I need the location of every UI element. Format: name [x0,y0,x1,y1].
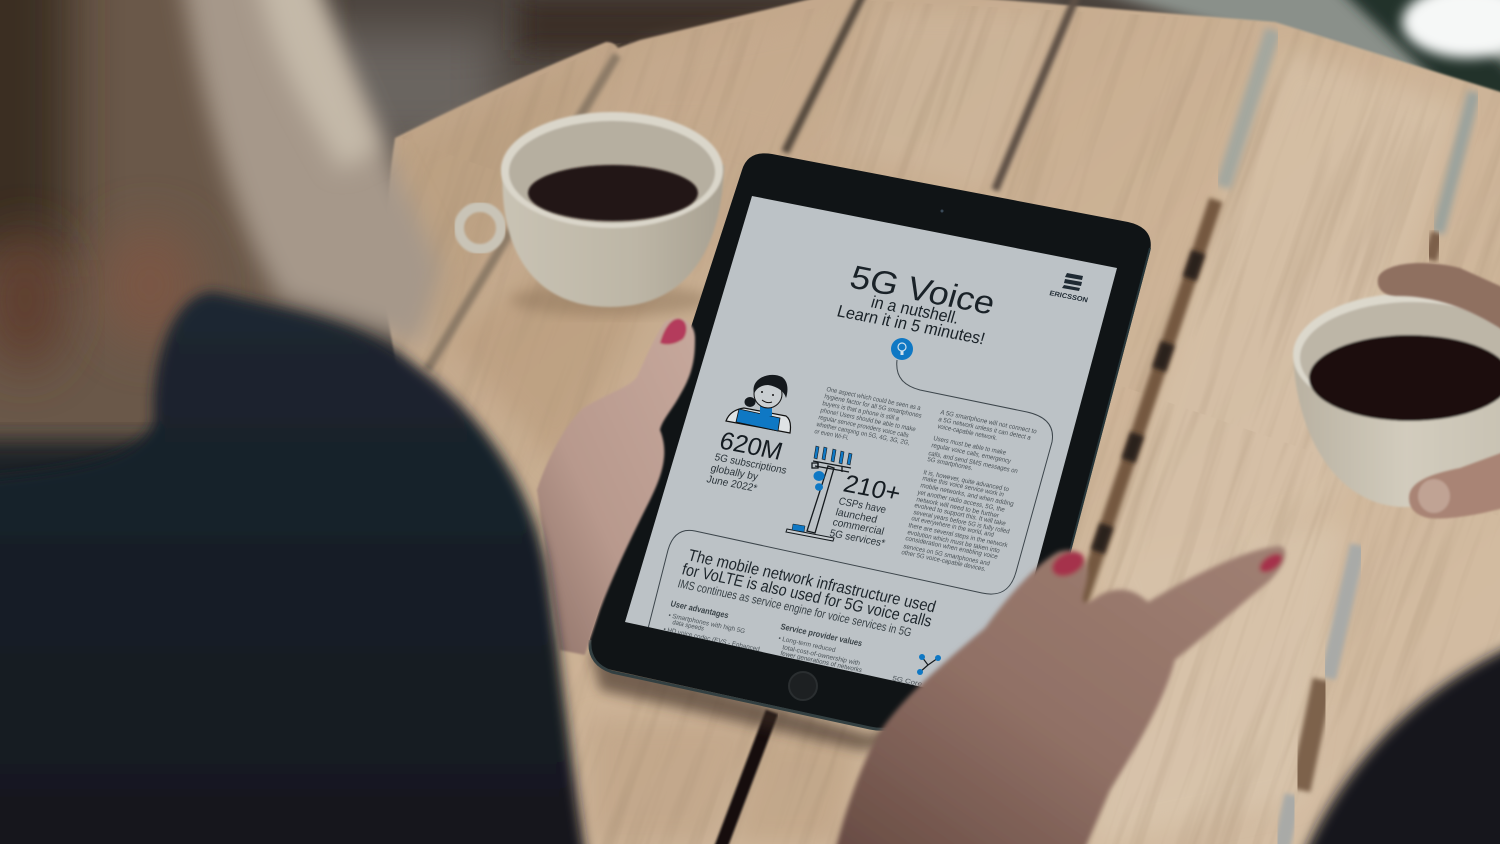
plank tone variations [400,10,1460,844]
stat: 620M: globally by [709,463,760,483]
text block: voice-capable network: services on 5G smartphones and [902,543,991,568]
home button [789,672,817,700]
list: user advantages [662,598,761,653]
icon: cell tower [786,446,852,541]
title: in a nutshell. [869,293,961,328]
tablet screen: infographic [625,196,1117,704]
text block: hygiene factor: hygiene factor for all 5G smartphones [823,393,923,420]
stat: 210+: commercial [831,517,885,538]
text block: voice-capable network: calls, and send SMS messages on [927,450,1019,475]
plank gaps [427,0,1474,844]
title: Learn it in 5 minutes! [835,302,987,348]
text block: hygiene factor: phone! Users should be able to make [819,407,917,433]
list: service provider values: • Long-term reduced [777,635,837,654]
list: user advantages: data speeds [671,619,705,633]
list: service provider values: total-cost-of-ownership with [781,644,861,667]
list: service provider values: Service provider values [779,621,864,648]
text block: hygiene factor [813,386,923,447]
text block: voice-capable network: A 5G smartphone will not connect to [939,409,1038,436]
cup handle [459,207,501,249]
camera [940,210,944,212]
text block: voice-capable network [900,409,1038,573]
tablet shadow [590,650,1040,750]
text block: hygiene factor: One aspect which could be seen as a [825,386,922,412]
list: user advantages: User advantages [669,598,730,620]
stat: 620M [706,432,786,491]
blurred person: dark sweater [0,292,587,844]
text block: voice-capable network: 5G smartphones. [926,456,974,472]
stat: 210+ [830,475,900,546]
nail: thumb [660,319,686,344]
text block: hygiene factor: whether camping on 5G, 4G, 3G, 2G, [815,421,911,447]
stat: 210+: launched [834,507,879,526]
text block: voice-capable network: yet another radio access, 5G, the [916,489,1006,514]
text block: voice-capable network: make this voice service work in [921,475,1005,499]
coffee cup, right [1293,293,1500,507]
text block: voice-capable network: mobile networks, and when adding [919,482,1015,508]
stat: 620M: 620M [716,427,786,466]
text block: voice-capable network: voice-capable network. [936,423,998,442]
nail: middle finger [1048,547,1088,581]
stat: 620M: June 2022* [705,474,758,495]
heading: VoLTE infrastructure: IMS continues as service engine for voice services in 5G [676,576,913,639]
text block: voice-capable network: several years before 5G is fully rolled [912,509,1011,536]
tablet body [589,153,1151,729]
icon: light bulb [891,338,913,360]
stat: 210+: CSPs have [837,496,887,516]
text block: voice-capable network: there are several steps in the network [907,522,1009,549]
text block: voice-capable network: Users must be able to make [932,435,1007,457]
text block: voice-capable network: evolution which must be taken into [906,529,1001,555]
logo: Ericsson: ERICSSON [1048,290,1089,304]
text block: voice-capable network: regular voice calls, emergency [930,442,1012,465]
heading: VoLTE infrastructure: for VoLTE is also used for 5G voice calls [680,561,934,631]
nail: index finger [1256,550,1286,576]
coffee cup, left [459,112,724,316]
logo: Ericsson [1048,273,1089,304]
hand holding right cup [1378,263,1500,518]
coffee [1309,335,1500,421]
stat: 210+: 5G services* [828,528,886,550]
text block: voice-capable network: a 5G network unless it can detect a [937,416,1032,442]
text block: hygiene factor: buyers is that a phone is still a [821,400,900,423]
right hand pointing [833,546,1286,844]
coffee [528,165,698,221]
stat: 210+: 210+ [840,470,904,508]
title [837,266,992,344]
connector outline [648,360,1053,627]
icon: 5G core network: 5G Core [891,675,923,688]
text block: voice-capable network: consideration when enabling voice [904,535,999,561]
icon: 5G core network [891,654,941,688]
wooden table top [388,0,1500,844]
list: service provider values [778,624,862,672]
title: 5G Voice [846,258,999,321]
list: service provider values: fewer generations of networks [779,650,863,674]
list: user advantages: • Smartphones with high 5G [667,612,746,635]
text block: voice-capable network: out everywhere in the world, and [910,515,995,539]
stat: 620M: 5G subscriptions [713,452,788,477]
blurred person: foreground shoulder right [1300,640,1500,844]
blurred person: hair [0,0,440,500]
heading: VoLTE infrastructure: The mobile network infrastructure used [686,547,938,616]
text block: voice-capable network: It is, however, quite advanced to [922,469,1010,493]
list: user advantages: • HD voice codec (EVS - Enhanced [662,626,761,653]
text block: hygiene factor: regular service providers voice calls [817,414,910,439]
text block: hygiene factor: or even Wi-Fi. [813,428,850,442]
text block: voice-capable network: evolved to support this. It will take [913,502,1007,528]
wood grain [604,10,1500,844]
left hand holding tablet [537,318,695,655]
text block: voice-capable network: network will need to be further [915,496,1000,520]
text block: voice-capable network: other 5G voice-capable devices. [900,549,987,573]
icon: woman [726,375,790,433]
